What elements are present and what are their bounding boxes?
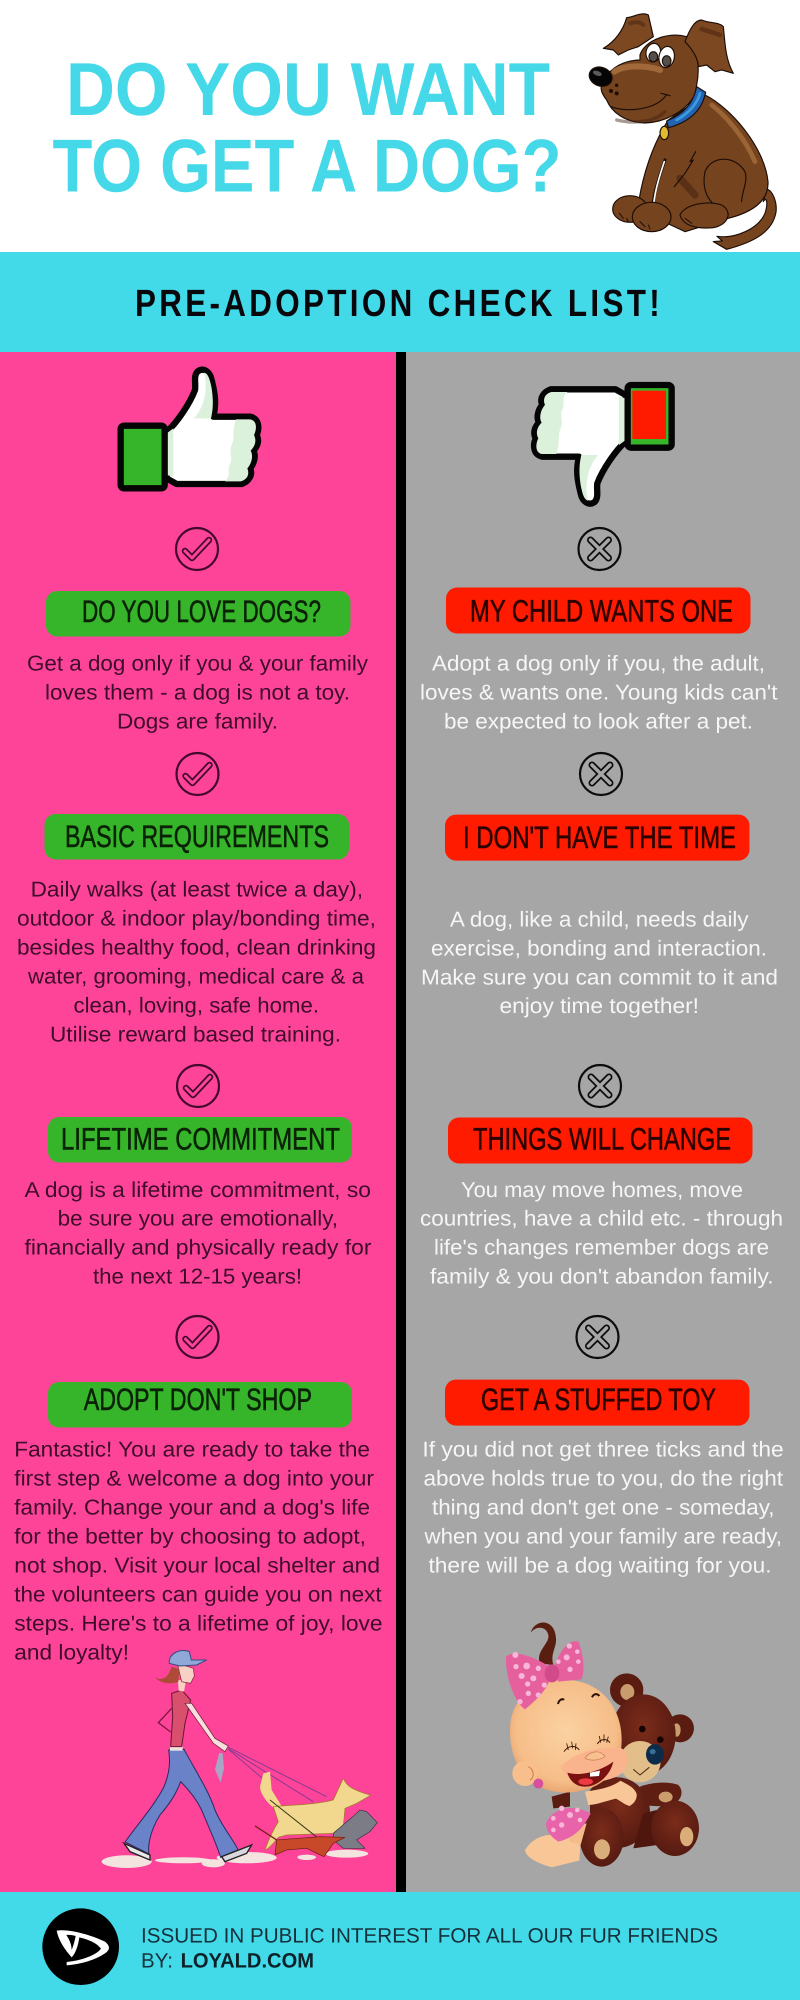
text block: get a stuffed toy: above holds true to you, do the right bbox=[424, 1466, 783, 1490]
subtitle band: PRE-ADOPTION CHECK LIST! bbox=[135, 283, 663, 325]
text block: lifetime commitment: financially and physically ready for bbox=[24, 1236, 372, 1260]
text block: i don't have the time: exercise, bonding and interaction. bbox=[431, 936, 767, 960]
text block: lifetime commitment: the next 12-15 years! bbox=[93, 1265, 302, 1289]
text block: adopt don't shop bbox=[14, 1437, 383, 1664]
text block: i don't have the time: Make sure you can commit to it and bbox=[421, 965, 778, 989]
text block: basic requirements bbox=[17, 877, 376, 1046]
header panel bbox=[0, 0, 800, 252]
text block: my child wants one: Adopt a dog only if you, the adult, bbox=[432, 652, 765, 676]
text block: lifetime commitment bbox=[24, 1178, 372, 1289]
icon: check mark 1 bbox=[176, 528, 218, 570]
text block: get a stuffed toy bbox=[422, 1437, 784, 1578]
text block: adopt don't shop: first step & welcome a dog into your bbox=[14, 1466, 374, 1490]
text block: get a stuffed toy: when you and your family are ready, bbox=[423, 1525, 782, 1549]
icon: cross mark 1 bbox=[578, 528, 620, 570]
text block: do you love dogs: Get a dog only if you & your family bbox=[27, 652, 368, 676]
heading: do you love dogs bbox=[46, 591, 350, 636]
text block: things will change: family & you don't abandon family. bbox=[430, 1265, 774, 1289]
heading: get a stuffed toy bbox=[445, 1380, 750, 1426]
icon: thumbs up bbox=[121, 370, 258, 488]
text block: get a stuffed toy: If you did not get three ticks and the bbox=[422, 1437, 784, 1461]
text block: basic requirements: Daily walks (at least twice a day), bbox=[31, 877, 363, 901]
text block: things will change: You may move homes, move bbox=[461, 1178, 743, 1202]
icon: cross mark 3 bbox=[579, 1065, 621, 1107]
title: DO YOU WANT bbox=[66, 47, 550, 131]
text block: my child wants one: loves & wants one. Young kids can't bbox=[420, 681, 778, 705]
icon: check mark 3 bbox=[177, 1065, 219, 1107]
text block: adopt don't shop: Fantastic! You are ready to take the bbox=[14, 1437, 370, 1461]
text block: adopt don't shop: the volunteers can guide you on next bbox=[14, 1582, 382, 1606]
panel: reasons not to get a dog bbox=[406, 352, 800, 1892]
text block: i don't have the time: A dog, like a child, needs daily bbox=[450, 907, 749, 931]
footer text bbox=[141, 1925, 718, 1972]
text block: things will change bbox=[420, 1178, 783, 1289]
text block: lifetime commitment: be sure you are emotionally, bbox=[58, 1207, 338, 1231]
text block: i don't have the time bbox=[421, 907, 778, 1018]
icon: loyald logo bbox=[42, 1908, 119, 1985]
heading: adopt don't shop bbox=[48, 1382, 352, 1428]
text block: lifetime commitment: A dog is a lifetime commitment, so bbox=[24, 1178, 371, 1202]
text block: things will change: countries, have a child etc. - through bbox=[420, 1207, 783, 1231]
baby bbox=[510, 1623, 637, 1867]
divider column bbox=[396, 352, 406, 1892]
text block: do you love dogs bbox=[27, 652, 368, 734]
panel: reasons to get a dog bbox=[0, 352, 396, 1892]
footer band bbox=[0, 1892, 800, 2000]
text block: get a stuffed toy: there will be a dog waiting for you. bbox=[428, 1554, 772, 1578]
text block: my child wants one bbox=[420, 652, 778, 734]
title: TO GET A DOG? bbox=[52, 124, 562, 208]
heading: lifetime commitment: LIFETIME COMMITMENT bbox=[61, 1121, 340, 1156]
ground bbox=[102, 1850, 368, 1868]
text block: adopt don't shop: for the better by choosing to adopt, bbox=[14, 1525, 366, 1549]
icon: check mark 2 bbox=[176, 753, 218, 795]
text block: adopt don't shop: family. Change your and a dog's life bbox=[14, 1495, 370, 1519]
text block: adopt don't shop: and loyalty! bbox=[14, 1640, 129, 1664]
heading: things will change bbox=[448, 1118, 752, 1164]
text block: my child wants one: be expected to look after a pet. bbox=[444, 710, 753, 734]
icon: cross mark 4 bbox=[576, 1316, 618, 1358]
heading: get a stuffed toy: GET A STUFFED TOY bbox=[481, 1382, 716, 1417]
hair bow bbox=[506, 1641, 583, 1832]
heading: adopt don't shop: ADOPT DON'T SHOP bbox=[84, 1382, 312, 1417]
footer text: BY: bbox=[141, 1949, 173, 1972]
illustration: baby hugging teddy bear bbox=[506, 1623, 699, 1867]
subtitle band bbox=[0, 252, 800, 352]
text block: adopt don't shop: steps. Here's to a lifetime of joy, love bbox=[14, 1611, 383, 1635]
illustration: woman walking dogs bbox=[102, 1651, 377, 1868]
teddy bear bbox=[580, 1673, 699, 1867]
text block: basic requirements: water, grooming, medical care & a bbox=[27, 965, 364, 989]
text block: adopt don't shop: not shop. Visit your local shelter and bbox=[14, 1554, 380, 1578]
text block: do you love dogs: loves them - a dog is not a toy. bbox=[45, 681, 350, 705]
text block: things will change: life's changes remember dogs are bbox=[434, 1236, 769, 1260]
text block: basic requirements: Utilise reward based training. bbox=[50, 1022, 341, 1046]
heading: lifetime commitment bbox=[48, 1117, 352, 1162]
heading: do you love dogs: DO YOU LOVE DOGS? bbox=[82, 594, 321, 629]
text block: get a stuffed toy: thing and don't get one - someday, bbox=[432, 1495, 774, 1519]
icon: cross mark 2 bbox=[580, 753, 622, 795]
footer text: LOYALD.COM bbox=[181, 1949, 314, 1972]
heading: i don't have the time bbox=[445, 815, 750, 861]
text block: i don't have the time: enjoy time together! bbox=[500, 994, 699, 1018]
icon: cartoon brown dog bbox=[587, 14, 776, 249]
text block: basic requirements: clean, loving, safe home. bbox=[74, 994, 319, 1018]
heading: basic requirements: BASIC REQUIREMENTS bbox=[65, 819, 329, 854]
heading: my child wants one bbox=[446, 588, 750, 634]
heading: basic requirements bbox=[44, 814, 349, 860]
icon: check mark 4 bbox=[176, 1316, 218, 1358]
icon: thumbs down bbox=[534, 385, 672, 504]
footer text: ISSUED IN PUBLIC INTEREST FOR ALL OUR FUR FRIENDS bbox=[141, 1925, 718, 1948]
title bbox=[52, 47, 562, 208]
text block: do you love dogs: Dogs are family. bbox=[117, 710, 278, 734]
text block: basic requirements: outdoor & indoor play/bonding time, bbox=[17, 906, 376, 930]
text block: basic requirements: besides healthy food, clean drinking bbox=[17, 935, 376, 959]
